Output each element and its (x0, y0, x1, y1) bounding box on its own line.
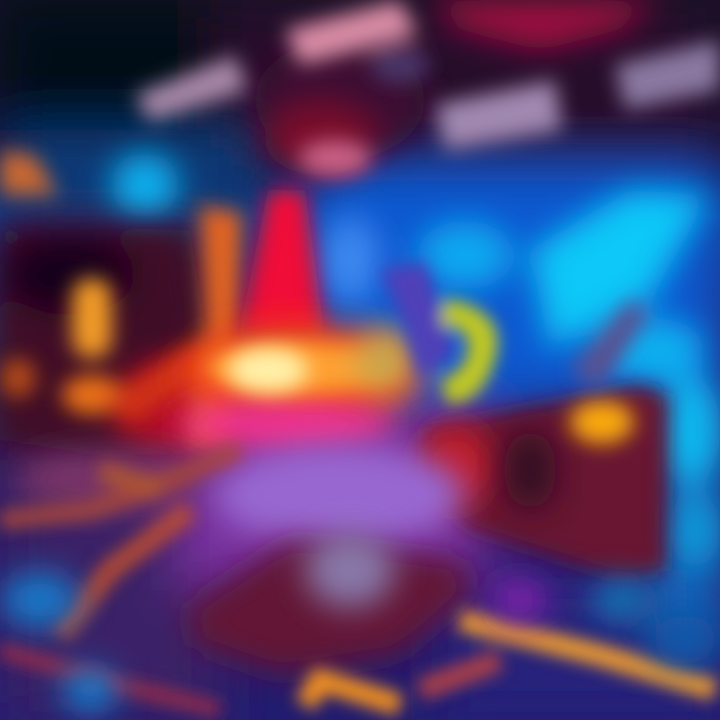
dark red rock (185, 532, 475, 675)
purple crescent and yellow arc (380, 262, 498, 405)
cyan sky patches (111, 153, 720, 568)
bottom blue blobs (0, 572, 717, 712)
red beam (238, 190, 325, 340)
pale purple mound (15, 445, 465, 545)
central explosion glow (175, 323, 420, 451)
orange circuit lines (0, 450, 715, 710)
left dark machine (0, 225, 220, 460)
top pale streaks (135, 0, 720, 176)
left orange glows (0, 150, 242, 450)
red box device (417, 300, 668, 578)
top hanging panels (255, 0, 660, 175)
